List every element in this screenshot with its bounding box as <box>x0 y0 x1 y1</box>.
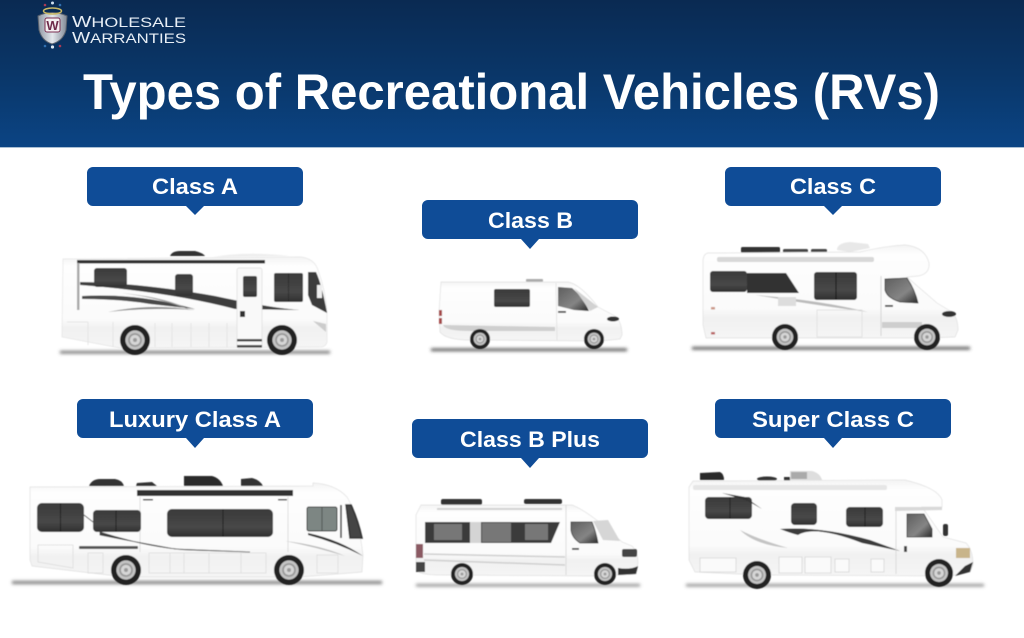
label: Class B <box>422 200 638 249</box>
label: Class B Plus <box>412 419 648 468</box>
label: Class B Plus: Class B Plus <box>460 427 600 452</box>
vehicle: Class B <box>431 279 627 351</box>
label: Class B: Class B <box>488 208 573 233</box>
label: Luxury Class A: Luxury Class A <box>109 407 281 432</box>
label: Class C: Class C <box>790 174 876 199</box>
logo: Wholesale Warranties <box>38 2 186 49</box>
vehicle: Class C <box>692 242 970 350</box>
title: Types of Recreational Vehicles (RVs) <box>83 64 940 120</box>
vehicle: Class B Plus <box>416 499 640 586</box>
label: Class C <box>725 167 941 215</box>
logo text: W ARRANTIES <box>72 30 186 47</box>
label: Super Class C <box>715 399 951 448</box>
logo text <box>72 14 186 47</box>
label: Super Class C: Super Class C <box>752 407 914 432</box>
label: Class A: Class A <box>152 174 238 199</box>
label: Class A <box>87 167 303 215</box>
icon: shield: W <box>46 18 59 33</box>
vehicle: Class A <box>60 251 330 355</box>
vehicle: Luxury Class A <box>12 476 382 585</box>
label: Luxury Class A <box>77 399 313 448</box>
header band <box>0 0 1024 148</box>
vehicle: Super Class C <box>686 471 984 589</box>
icon: shield <box>38 2 67 49</box>
logo text: W HOLESALE <box>72 14 186 31</box>
